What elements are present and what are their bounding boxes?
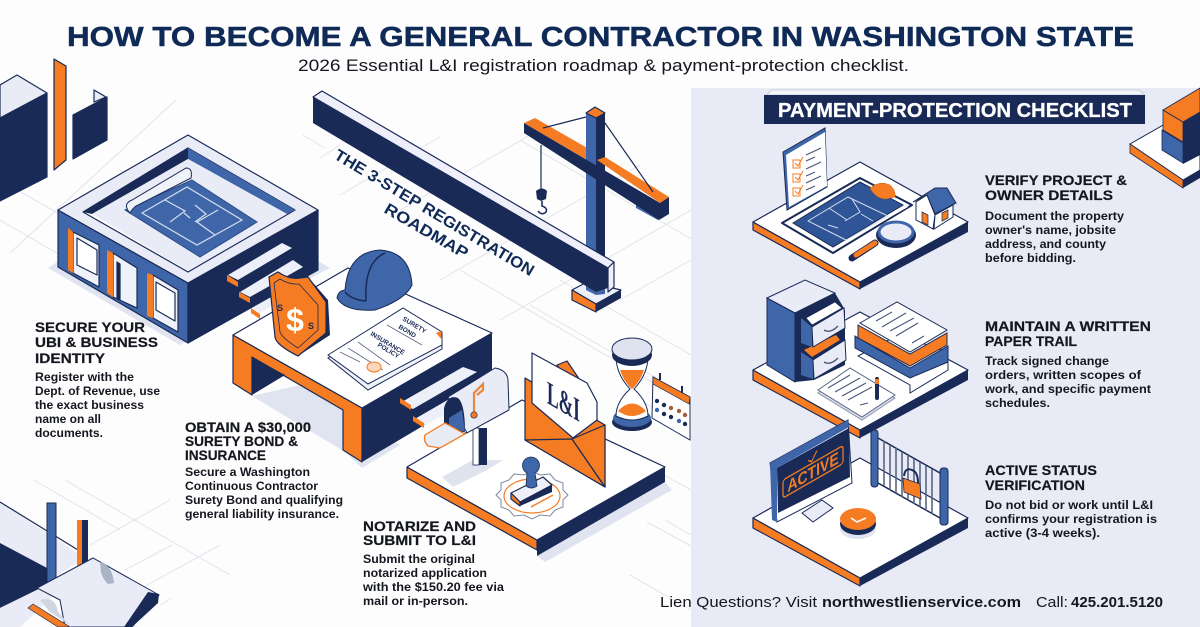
- footer contact line: [660, 594, 1163, 611]
- title: HOW TO BECOME A GENERAL CONTRACTOR IN WASHINGTON STATE: [67, 21, 1134, 52]
- illustration: top-right cubes: [1130, 88, 1200, 188]
- checklist heading: PAYMENT-PROTECTION CHECKLIST: [778, 100, 1132, 122]
- icon: monitor showing ACTIVE: [770, 420, 852, 522]
- checklist item 1 text: owner's name, jobsite: [985, 223, 1116, 237]
- concrete beam: [313, 91, 614, 292]
- icon: hard hat: [337, 250, 412, 310]
- subtitle: 2026 Essential L&I registration roadmap & payment-protection checklist.: [298, 56, 909, 75]
- icon: shield with dollar: $: [286, 302, 304, 338]
- icon: stacked books and papers: [855, 302, 948, 393]
- checklist item 2 text: PAPER TRAIL: [985, 333, 1077, 349]
- icon: filing cabinet: [767, 280, 846, 382]
- icon: shield with dollar: S: [277, 303, 283, 313]
- checklist item 3 text: [985, 462, 1157, 540]
- checklist item 1 text: Document the property: [985, 209, 1124, 223]
- footer contact line: northwestlienservice.com: [822, 594, 1021, 611]
- icon: locked gate: [871, 430, 948, 525]
- step 2 text: [185, 419, 343, 521]
- checklist item 2 text: MAINTAIN A WRITTEN: [985, 318, 1151, 334]
- icon: shield with dollar: S: [308, 321, 314, 331]
- step 1 text: [35, 319, 160, 440]
- illustration: verify project platform: [753, 128, 968, 289]
- checklist item 3 text: ACTIVE STATUS: [985, 462, 1097, 478]
- icon: monitor showing ACTIVE: ACTIVE: [787, 448, 839, 496]
- checklist item 2 text: [984, 318, 1151, 410]
- illustration: bond platform: [233, 250, 492, 468]
- icon: shield with dollar: [269, 272, 330, 356]
- illustration: crane: [313, 91, 669, 312]
- checklist item 1 text: before bidding.: [985, 251, 1076, 265]
- step 1 text: the exact business: [35, 398, 144, 412]
- step 2 text: Surety Bond and qualifying: [185, 493, 343, 507]
- illustration: top-left blocks: [0, 59, 107, 201]
- icon: calendar: [652, 373, 690, 440]
- steps: [227, 243, 303, 319]
- step 2 text: general liability insurance.: [185, 507, 339, 521]
- step 2 text: Secure a Washington: [185, 465, 310, 479]
- step 3 text: notarized application: [363, 566, 487, 580]
- roadmap label: THE 3-STEP REGISTRATION: [331, 147, 537, 280]
- footer contact line: Call:: [1036, 594, 1068, 611]
- checklist item 3 text: VERIFICATION: [985, 477, 1085, 493]
- step 1 text: Register with the: [35, 370, 134, 384]
- illustration: submission platform: [407, 338, 690, 562]
- step 3 text: Submit the original: [363, 552, 475, 566]
- surety bond and insurance documents: INSURANCE: [369, 331, 406, 357]
- checklist item 2 text: orders, written scopes of: [985, 368, 1142, 382]
- step 2 text: INSURANCE: [185, 447, 266, 463]
- checklist item 3 text: confirms your registration is: [985, 512, 1157, 526]
- step 3 text: mail or in-person.: [363, 594, 468, 608]
- illustration: active status platform: [753, 420, 968, 586]
- surety bond and insurance documents: SURETY: [401, 316, 428, 336]
- icon: mailbox: [424, 368, 509, 465]
- blueprint sheet: [125, 168, 257, 257]
- step 3 text: SUBMIT TO L&I: [363, 532, 476, 548]
- surety bond and insurance documents: BOND: [397, 324, 417, 340]
- icon: notary stamp: [496, 457, 568, 519]
- door and windows: [68, 228, 178, 332]
- checklist item 2 text: Track signed change: [985, 354, 1109, 368]
- step 3 text: [362, 518, 504, 608]
- icon: hourglass: [612, 338, 652, 431]
- step 1 text: documents.: [35, 426, 103, 440]
- illustration: paper trail platform: [753, 280, 968, 438]
- icon: envelope with L&I letter: [525, 353, 605, 487]
- step 2 text: SURETY BOND &: [185, 433, 298, 449]
- checklist item 2 text: schedules.: [985, 396, 1050, 410]
- checklist item 3 text: Do not bid or work until L&I: [985, 498, 1153, 512]
- illustration: bottom-left structure: [0, 502, 159, 627]
- checklist item 1 text: [985, 172, 1127, 265]
- roadmap label: ROADMAP: [381, 201, 471, 263]
- footer contact line: 425.201.5120: [1071, 594, 1163, 611]
- icon: clipboard blueprint: [782, 178, 912, 253]
- checklist item 1 text: address, and county: [985, 237, 1106, 251]
- icon: envelope with L&I letter: L&I: [547, 375, 580, 430]
- step 1 text: UBI & BUSINESS: [35, 334, 158, 350]
- step 1 text: SECURE YOUR: [35, 319, 145, 335]
- checklist item 1 text: OWNER DETAILS: [985, 187, 1113, 203]
- step 2 text: OBTAIN A $30,000: [185, 419, 311, 435]
- step 1 text: Dept. of Revenue, use: [35, 384, 160, 398]
- illustration: building with blueprint: [48, 135, 330, 345]
- checklist item 3 text: active (3-4 weeks).: [985, 526, 1100, 540]
- icon: small house: [913, 188, 956, 229]
- step 1 text: name on all: [35, 412, 101, 426]
- footer contact line: Lien Questions? Visit: [660, 594, 818, 611]
- icon: magnifying glass: [852, 222, 916, 258]
- icon: confirm button: [840, 508, 876, 539]
- step 2 text: Continuous Contractor: [185, 479, 318, 493]
- checklist heading: [764, 90, 1145, 124]
- step 3 text: with the $150.20 fee via: [362, 580, 504, 594]
- checklist item 1 text: VERIFY PROJECT &: [985, 172, 1127, 188]
- checklist item 2 text: work, and specific payment: [984, 382, 1151, 396]
- icon: checklist board: [783, 128, 827, 210]
- step 3 text: NOTARIZE AND: [363, 518, 476, 534]
- panel: checklist background: [691, 88, 1200, 627]
- icon: signed document and pen: [818, 368, 895, 420]
- surety bond and insurance documents: POLICY: [376, 342, 401, 361]
- step 1 text: IDENTITY: [35, 350, 106, 366]
- surety bond and insurance documents: [328, 308, 442, 390]
